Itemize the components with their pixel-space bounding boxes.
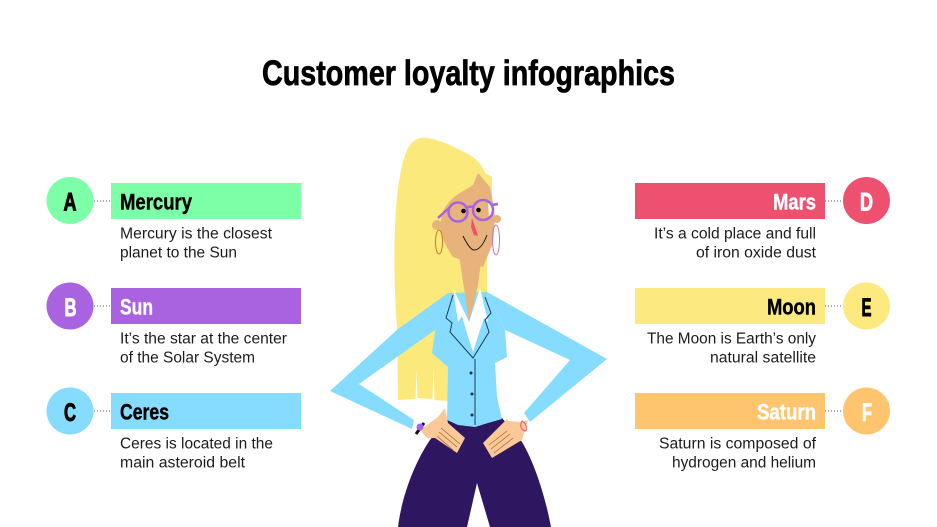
text: Ceres description (120, 436, 273, 472)
jacket lapel lines (446, 295, 491, 425)
badge F: F (862, 399, 872, 427)
nose (471, 218, 478, 236)
shirt collar (453, 288, 488, 352)
heading bar Moon (635, 288, 825, 324)
panel: F Saturn (635, 388, 890, 472)
earrings (436, 225, 500, 255)
text: Saturn description (659, 436, 817, 472)
heading bar Mercury (111, 183, 301, 219)
right hand (483, 412, 528, 458)
panel: A Mercury (46, 177, 301, 262)
panel: E Moon (635, 282, 890, 366)
badge E (843, 282, 890, 330)
panel: C Ceres (46, 388, 301, 472)
panel: D Mars (635, 177, 890, 262)
heading bar Mars: Mars (773, 190, 816, 214)
text: Sun description: of the Solar System (120, 350, 255, 366)
heading bar Mercury: Mercury (120, 190, 192, 214)
text: Mercury description (120, 226, 273, 262)
left arm and jacket shoulder (330, 293, 448, 429)
text: Sun description (120, 330, 287, 366)
text: Ceres description: Ceres is located in the (120, 436, 273, 452)
text: Mercury description: Mercury is the closest (120, 226, 273, 242)
badge B: B (64, 294, 76, 322)
text: Moon description: The Moon is Earth’s only (647, 330, 816, 348)
wristwatch (416, 423, 424, 434)
face (440, 173, 495, 267)
badge B (46, 282, 94, 330)
heading bar Saturn: Saturn (757, 400, 816, 424)
text: Mars description (654, 226, 817, 262)
hair (394, 138, 492, 401)
eyes (461, 208, 481, 213)
heading bar Saturn (635, 393, 825, 429)
badge C: C (64, 399, 76, 427)
text: Saturn description: hydrogen and helium (672, 454, 816, 472)
badge A (46, 177, 94, 224)
text: Saturn description: Saturn is composed of (659, 436, 817, 452)
illustration: woman with glasses (330, 138, 607, 527)
heading bar Moon: Moon (767, 294, 816, 320)
heading bar Sun: Sun (120, 294, 153, 320)
text: Mars description: of iron oxide dust (696, 244, 817, 262)
heading bar Ceres: Ceres (120, 400, 169, 424)
bracelet (521, 421, 526, 431)
text: Moon description (647, 330, 816, 366)
panel: B Sun (46, 282, 301, 366)
badge F (843, 388, 890, 434)
badge A: A (64, 188, 76, 216)
heading bar Sun (111, 288, 301, 324)
badge D: D (860, 188, 873, 216)
text: Sun description: It’s the star at the center (120, 330, 287, 348)
text: Mars description: It’s a cold place and full (654, 226, 816, 242)
text: Mercury description: planet to the Sun (120, 244, 237, 262)
left hand (420, 408, 465, 453)
right arm (487, 292, 607, 422)
jacket torso (432, 292, 507, 427)
heading bar Ceres (111, 393, 301, 429)
smile (463, 235, 487, 250)
lens highlight (488, 203, 494, 217)
badge E: E (862, 294, 872, 322)
neck (459, 255, 481, 322)
heading bar Mars (635, 183, 825, 219)
badge D (843, 177, 890, 224)
badge C (46, 388, 94, 434)
pants (398, 418, 551, 527)
text: Ceres description: main asteroid belt (120, 454, 246, 472)
buttons (470, 372, 474, 416)
glasses (438, 200, 498, 222)
ears (432, 215, 501, 230)
text: Moon description: natural satellite (710, 350, 816, 366)
title: Customer loyalty infographics (262, 54, 675, 93)
